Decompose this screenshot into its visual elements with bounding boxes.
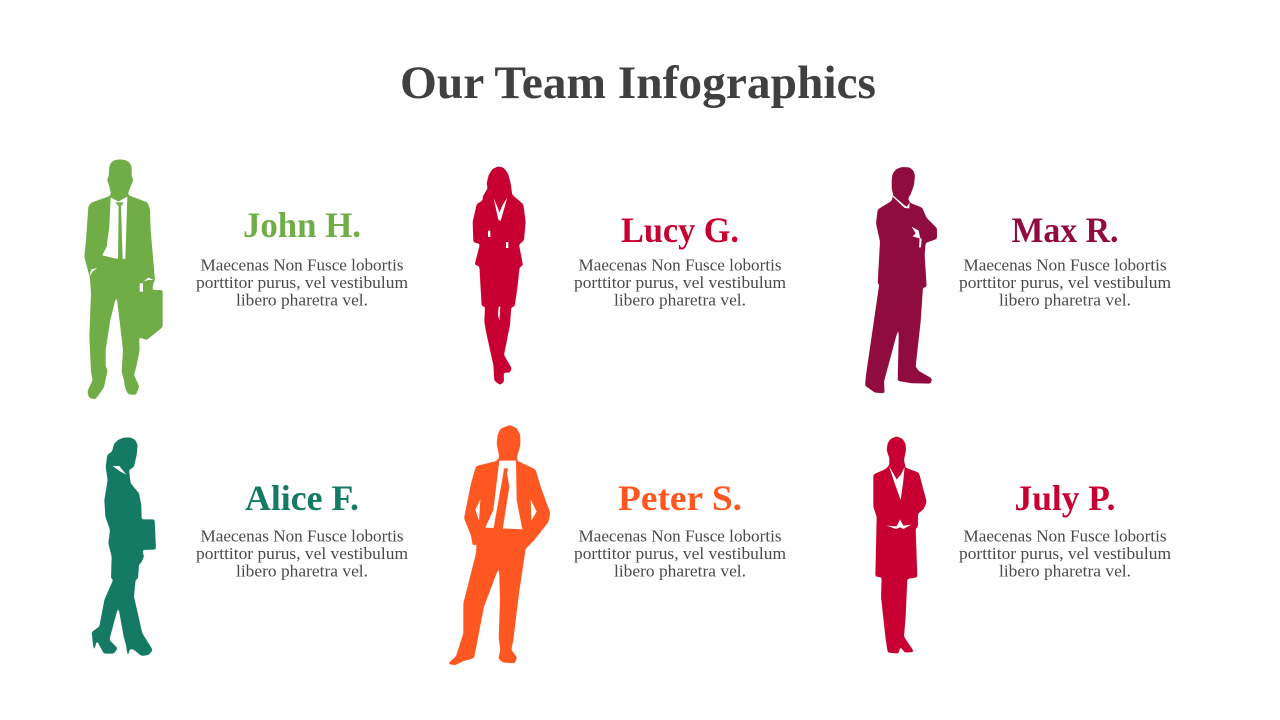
text block: Lucy G.: porttitor purus, vel vestibulum xyxy=(574,273,786,292)
panel: July P. xyxy=(874,437,1171,653)
name: Lucy G.: Lucy G. xyxy=(621,210,739,250)
text block: Alice F. xyxy=(196,526,408,580)
icon: woman in skirt suit silhouette xyxy=(473,167,525,385)
text block: Lucy G. xyxy=(574,256,786,310)
icon: man with hands in pockets silhouette xyxy=(448,425,550,665)
text block: John H.: porttitor purus, vel vestibulum xyxy=(196,273,408,292)
text block: Max R. xyxy=(959,256,1171,310)
icon: walking woman with folder silhouette xyxy=(92,438,156,657)
panel: Lucy G. xyxy=(473,167,786,385)
text block: July P. xyxy=(959,526,1171,580)
text block: John H.: Maecenas Non Fusce lobortis xyxy=(200,256,404,274)
panel: Max R. xyxy=(865,167,1171,393)
text block: Alice F.: porttitor purus, vel vestibulum xyxy=(196,544,408,563)
title: Our Team Infographics xyxy=(400,57,876,109)
text block: Max R.: porttitor purus, vel vestibulum xyxy=(959,273,1171,292)
text block: Lucy G.: Maecenas Non Fusce lobortis xyxy=(578,256,782,274)
text block: Max R.: libero pharetra vel. xyxy=(999,290,1131,310)
text block: Peter S.: porttitor purus, vel vestibulum xyxy=(574,544,786,563)
text block: Peter S.: Maecenas Non Fusce lobortis xyxy=(578,526,782,546)
text block: Peter S.: libero pharetra vel. xyxy=(614,562,746,580)
text block: July P.: Maecenas Non Fusce lobortis xyxy=(964,526,1166,546)
text block: John H. xyxy=(196,256,408,310)
text block: July P.: libero pharetra vel. xyxy=(999,562,1131,580)
panel: Peter S. xyxy=(448,425,786,665)
panel: John H. xyxy=(85,160,408,399)
icon: man with briefcase silhouette xyxy=(85,160,162,399)
text block: Alice F.: libero pharetra vel. xyxy=(236,562,368,580)
name: July P.: July P. xyxy=(1014,478,1116,518)
text block: Peter S. xyxy=(574,526,786,580)
text block: July P.: porttitor purus, vel vestibulum xyxy=(959,544,1171,563)
text block: Max R.: Maecenas Non Fusce lobortis xyxy=(964,256,1166,274)
panel: Alice F. xyxy=(92,438,408,657)
name: John H.: John H. xyxy=(243,205,361,245)
name: Peter S.: Peter S. xyxy=(618,478,742,518)
text block: John H.: libero pharetra vel. xyxy=(236,290,368,310)
text block: Lucy G.: libero pharetra vel. xyxy=(614,290,746,310)
name: Alice F.: Alice F. xyxy=(245,478,359,518)
icon: man with crossed arms silhouette xyxy=(865,167,937,393)
text block: Alice F.: Maecenas Non Fusce lobortis xyxy=(200,526,404,546)
icon: woman in long jacket silhouette xyxy=(874,437,926,653)
name: Max R.: Max R. xyxy=(1012,210,1118,250)
